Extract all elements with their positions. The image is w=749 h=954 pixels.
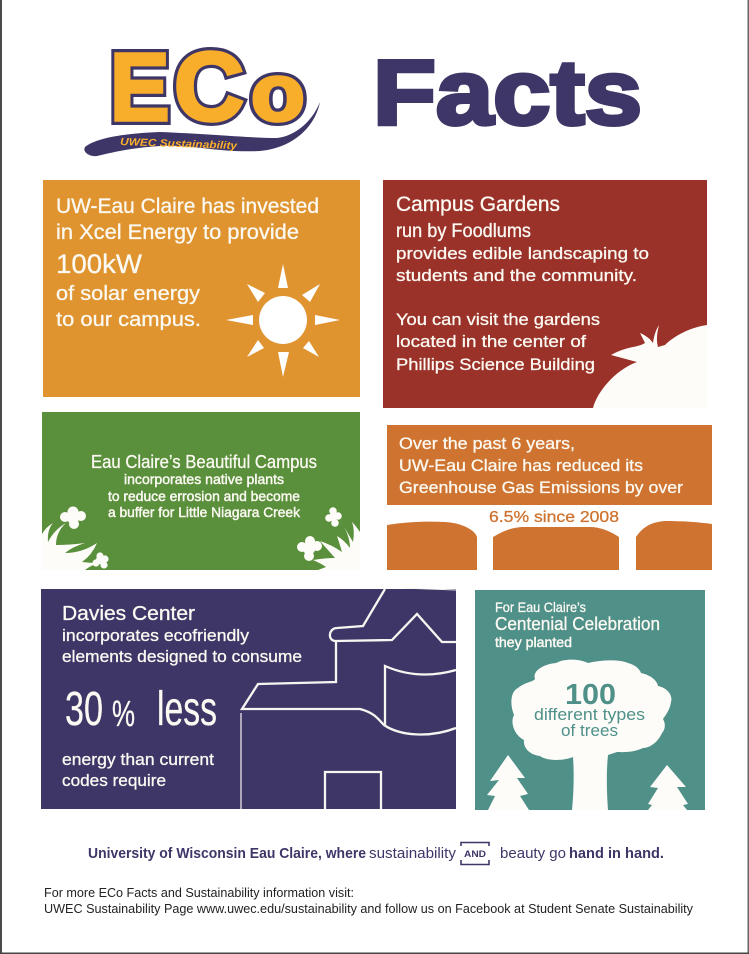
panel: beautiful campus [42, 412, 360, 570]
greenhouse text: Over the past 6 years, [399, 434, 575, 453]
teal panel text: For Eau Claire’s [495, 599, 586, 615]
Davies text: % [112, 693, 135, 734]
logo letters: E [110, 33, 170, 141]
gardens text: Campus Gardens [396, 193, 560, 216]
solar text: of solar energy [56, 283, 200, 305]
gardens text: You can visit the gardens [396, 310, 600, 329]
Davies text [62, 603, 302, 790]
green panel text: to reduce errosion and become [108, 488, 300, 504]
logo swoosh [84, 102, 320, 156]
panel: Davies Center [41, 588, 456, 809]
gardens text: students and the community. [396, 266, 637, 285]
solar text: UW-Eau Claire has invested [56, 195, 319, 218]
icon: tomato [593, 325, 707, 408]
green panel text [91, 452, 317, 520]
gardens text: provides edible landscaping to [396, 244, 649, 263]
footer: more information: For more ECo Facts and Sustainability information visit: [44, 885, 354, 900]
tagline: beauty go [500, 845, 566, 862]
panel: centennial trees [475, 590, 705, 810]
icon: pine trees [487, 755, 688, 810]
greenhouse text: UW-Eau Claire has reduced its [399, 456, 643, 475]
logo tagline: UWEC Sustainability [120, 136, 239, 152]
logo: ECo UWEC Sustainability [84, 32, 320, 156]
icon: sun [226, 264, 340, 377]
tagline: University of Wisconsin Eau Claire, where [88, 845, 366, 862]
icon: large tree [511, 660, 671, 810]
gardens text: Phillips Science Building [396, 355, 595, 374]
footer: more information [44, 885, 693, 916]
gardens text: run by Foodlums [396, 221, 531, 242]
gardens text: located in the center of [396, 332, 586, 351]
footer: more information: UWEC Sustainability Page www.uwec.edu/sustainability and follow us on Facebook at Student Senate Sustainability [44, 901, 693, 916]
Davies text: less [157, 683, 217, 736]
green panel text: Eau Claire’s Beautiful Campus [91, 452, 317, 472]
teal panel text: they planted [495, 634, 572, 650]
green panel text: a buffer for Little Niagara Creek [108, 504, 301, 520]
greenhouse text: Greenhouse Gas Emissions by over [399, 478, 683, 497]
tagline: sustainability [369, 845, 456, 862]
AND bracket [461, 842, 489, 864]
tagline [88, 842, 664, 864]
gardens text [396, 193, 649, 374]
Davies text: Davies Center [62, 603, 195, 625]
solar text: to our campus. [56, 309, 201, 331]
solar text [56, 195, 319, 331]
Davies text: elements designed to consume [62, 647, 302, 666]
icon: left flowers and grass [42, 506, 109, 570]
tree text: of trees [561, 721, 618, 740]
solar text: 100kW [56, 249, 143, 279]
solar text: in Xcel Energy to provide [56, 221, 299, 244]
panel: solar energy [43, 180, 360, 397]
logo letters: o [251, 48, 305, 137]
greenhouse text [399, 434, 683, 497]
logo letters [110, 32, 305, 141]
icon: building outline [241, 588, 456, 809]
AND bracket: AND [464, 849, 486, 860]
title: Facts: Facts [373, 42, 642, 144]
teal panel text [495, 599, 660, 650]
tree text: different types [534, 705, 645, 724]
panel: campus gardens [383, 180, 707, 408]
Davies text: 30 [65, 683, 103, 736]
logo letters: C [174, 32, 244, 141]
tree text: 100 [565, 679, 616, 711]
tree text [534, 679, 645, 740]
statistic: 6.5% since 2008: 6.5% since 2008 [489, 509, 619, 526]
Davies text: incorporates ecofriendly [62, 626, 250, 645]
logo letters: E [110, 33, 170, 141]
arches [387, 521, 712, 570]
icon: right flowers and grass [297, 507, 360, 570]
logo letters: o [251, 48, 305, 137]
tagline: hand in hand. [569, 845, 664, 862]
panel: greenhouse gas [387, 425, 712, 570]
green panel text: incorporates native plants [124, 471, 284, 487]
teal panel text: Centenial Celebration [495, 614, 660, 634]
logo letters: C [174, 32, 244, 141]
Davies text: codes require [62, 771, 166, 790]
Davies text: energy than current [62, 750, 214, 769]
